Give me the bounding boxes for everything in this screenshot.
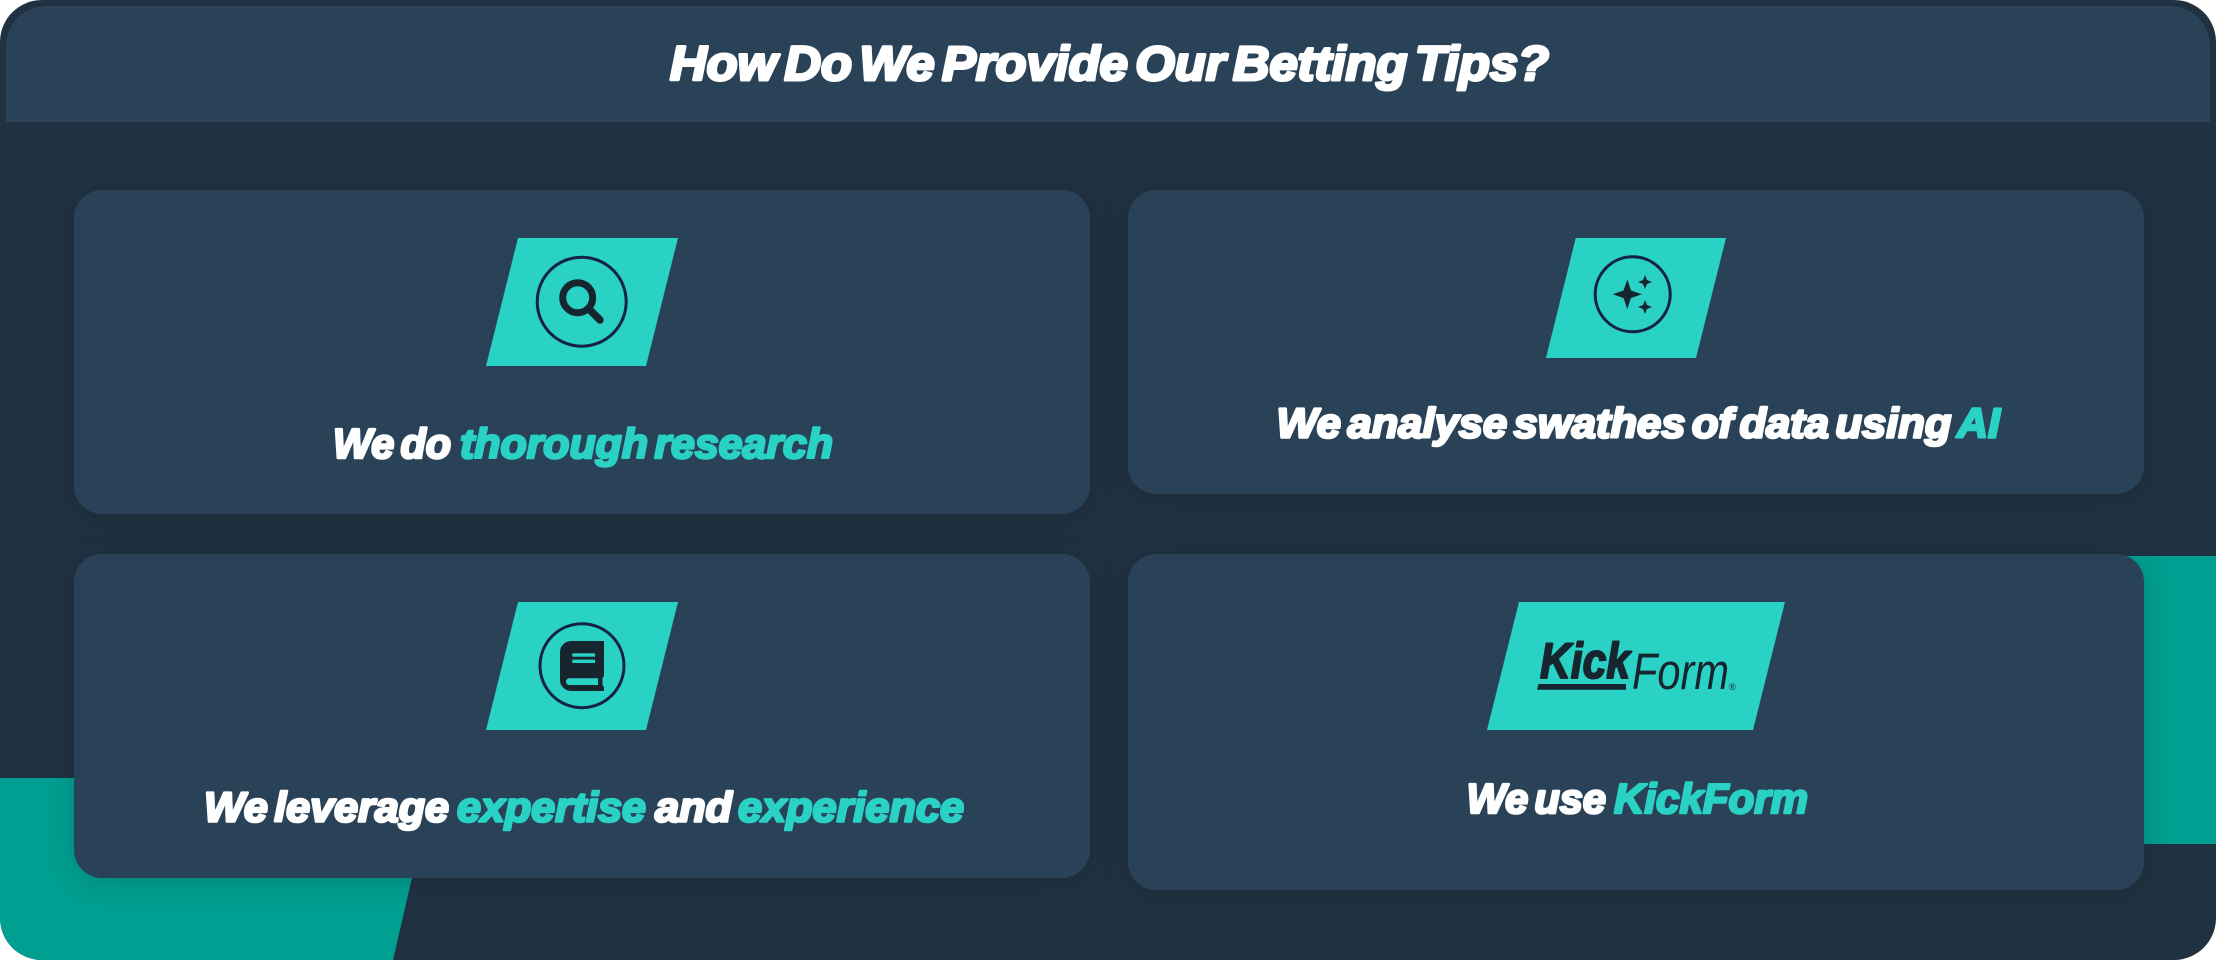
icon: book	[486, 602, 678, 730]
icon: sparkles	[1546, 238, 1726, 358]
panel: expertise and experience	[74, 554, 1090, 878]
icon: kickform logo: Form	[1632, 643, 1729, 700]
icon: kickform logo: Kick	[1540, 633, 1632, 689]
icon: magnifying glass	[486, 238, 678, 366]
text: we analyse swathes of data using AI: We analyse swathes of data using	[1276, 400, 1952, 447]
text: we leverage expertise and experience: expertise	[457, 784, 646, 831]
text: we use kickform	[1467, 775, 1808, 822]
text: we leverage expertise and experience	[204, 784, 964, 831]
text: we use kickform: We use	[1467, 775, 1606, 822]
panel: thorough research	[74, 190, 1090, 514]
panel: kickform	[1128, 554, 2144, 890]
accent shape: right	[2126, 556, 2216, 844]
panel: AI analysis	[1128, 190, 2144, 494]
text: we leverage expertise and experience: We leverage	[204, 784, 449, 831]
accent shape: bottom left	[0, 778, 435, 960]
text: we leverage expertise and experience: and	[655, 784, 733, 831]
text: we leverage expertise and experience: experience	[738, 784, 964, 831]
icon: kickform logo	[1487, 602, 1785, 730]
icon: kickform logo: ®	[1729, 682, 1736, 692]
text: we use kickform: KickForm	[1614, 775, 1808, 822]
title: How Do We Provide Our Betting Tips?	[670, 38, 1549, 91]
text: we do thorough research: We do	[333, 420, 451, 467]
text: we analyse swathes of data using AI: AI	[1956, 400, 2001, 447]
header bar	[6, 6, 2210, 122]
text: we do thorough research: thorough research	[460, 420, 833, 467]
